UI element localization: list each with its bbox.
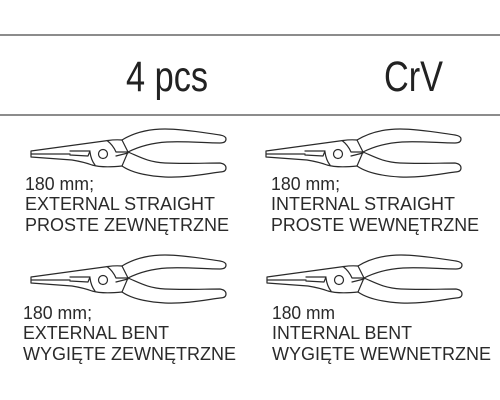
text: external bent label: 180 mm; — [23, 303, 92, 323]
text: internal bent label — [272, 303, 491, 364]
text: internal straight label — [271, 174, 479, 235]
text: internal bent label: WYGIĘTE WEWNETRZNE — [272, 344, 491, 364]
panel: internal straight — [266, 129, 479, 235]
heading: CrV: CrV — [384, 53, 443, 101]
text: internal bent label: 180 mm — [272, 303, 335, 323]
icon: pliers internal bent — [267, 255, 462, 303]
text: external straight label: EXTERNAL STRAIGHT — [25, 194, 215, 214]
icon: pliers external straight — [31, 129, 226, 177]
text: external bent label — [23, 303, 236, 364]
panel: external straight — [25, 129, 229, 235]
panel: internal bent — [267, 255, 491, 364]
text: internal straight label: PROSTE WEWNĘTRZNE — [271, 215, 479, 235]
text: external bent label: EXTERNAL BENT — [23, 323, 169, 343]
icon: pliers external bent — [31, 255, 226, 303]
text: internal straight label: 180 mm; — [271, 174, 340, 194]
text: internal bent label: INTERNAL BENT — [272, 323, 412, 343]
text: external straight label: PROSTE ZEWNĘTRZNE — [25, 215, 229, 235]
text: internal straight label: INTERNAL STRAIGHT — [271, 194, 455, 214]
text: external bent label: WYGIĘTE ZEWNĘTRZNE — [23, 344, 236, 364]
text: external straight label: 180 mm; — [25, 174, 94, 194]
panel: external bent — [23, 255, 236, 364]
heading: 4 pcs: 4 pcs — [126, 53, 208, 101]
icon: pliers internal straight — [266, 129, 461, 177]
text: external straight label — [25, 174, 229, 235]
